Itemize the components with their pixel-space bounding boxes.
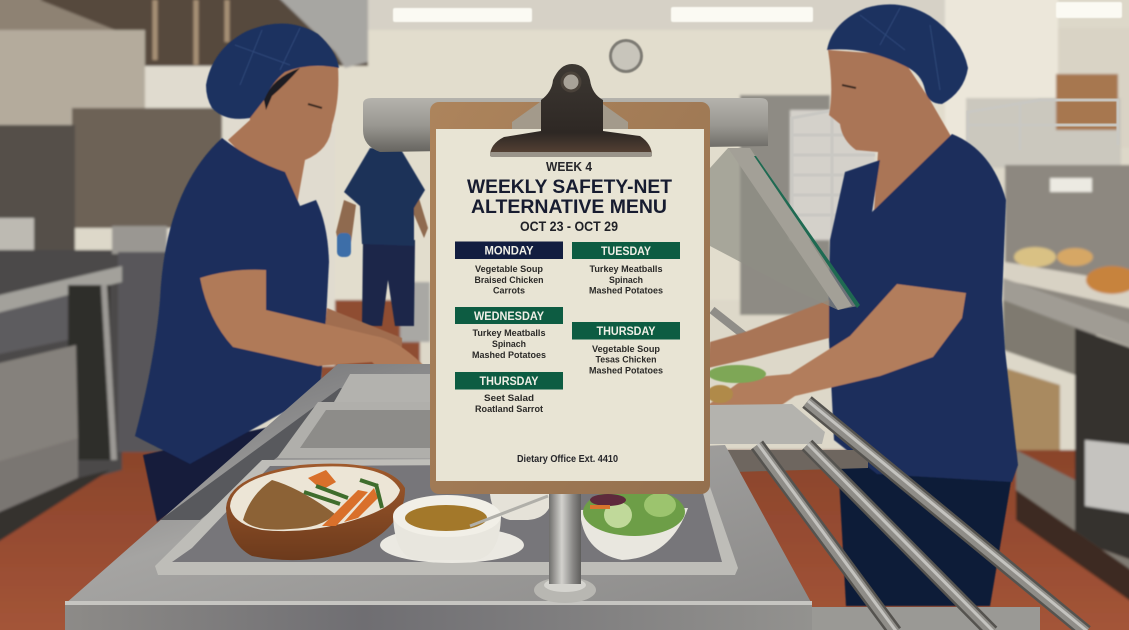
ceiling lights: [393, 2, 1122, 22]
Monday block: Carrots: [493, 286, 525, 296]
chicken: [243, 480, 335, 530]
right worker: hairnet: [827, 4, 968, 104]
clipboard post: [534, 492, 596, 603]
left worker: far arm: [325, 308, 402, 350]
week label: WEEK 4: [546, 160, 592, 174]
right worker: scrub top: [828, 134, 1018, 482]
Thursday block, left column: [455, 372, 563, 415]
front tray rim: [155, 458, 738, 575]
Tuesday block: Spinach: [609, 275, 643, 286]
worker in background: [336, 148, 428, 326]
Thursday block, right column: [572, 322, 680, 376]
rail lower bar: [812, 607, 1040, 630]
floor rails: [757, 401, 1087, 630]
wall clock: [609, 39, 643, 73]
right worker: [708, 4, 1018, 606]
Wednesday block: [455, 307, 563, 361]
clip hinge wings: [512, 102, 628, 129]
left worker: hairnet: [206, 23, 339, 119]
guard metal arm: [728, 148, 852, 310]
Monday block: Braised Chicken: [474, 275, 544, 286]
right worker: near arm: [708, 284, 966, 428]
sneeze guard: [363, 98, 860, 310]
Tuesday block: [572, 242, 680, 296]
counter front band: [65, 604, 812, 630]
dietary office contact: Dietary Office Ext. 4410: [517, 454, 618, 465]
Thursday block, right column: Vegetable Soup: [592, 344, 660, 355]
guard crossbar: [363, 98, 768, 152]
Thursday block, left column: Roatland Sarrot: [475, 404, 544, 415]
Thursday block, left column: THURSDAY: [480, 376, 539, 388]
guard green edge: [754, 156, 860, 308]
Wednesday block: Mashed Potatoes: [472, 350, 546, 361]
counter top: [65, 364, 812, 604]
left worker: eye: [308, 104, 322, 108]
left worker: scrub top: [135, 138, 329, 464]
right worker: neck and face: [828, 50, 952, 212]
Tuesday block: Turkey Meatballs: [590, 264, 662, 275]
Thursday block, right column: Mashed Potatoes: [589, 366, 663, 376]
carrots: [308, 470, 378, 526]
food: salad bowl: [580, 488, 688, 560]
food: soup bowl on saucer: [380, 495, 548, 563]
clip ring: [562, 73, 580, 91]
left worker: [135, 23, 430, 522]
guard glass panel: [710, 148, 858, 310]
menu paper: [436, 129, 704, 481]
Wednesday block: Turkey Meatballs: [472, 328, 546, 339]
middle pan: [277, 402, 430, 458]
left worker: trousers: [143, 420, 300, 522]
clip body: [490, 64, 652, 156]
right worker: far arm: [708, 300, 829, 368]
Monday block: [455, 242, 563, 296]
food: chicken and vegetables dish: [226, 464, 405, 560]
clip edge: [490, 152, 652, 157]
Wednesday block: Spinach: [492, 339, 526, 350]
rail cross support: [722, 450, 868, 472]
green beans: [304, 480, 382, 508]
right worker: eye: [842, 85, 856, 88]
Monday block: MONDAY: [484, 246, 534, 258]
salad on tray at right: [707, 365, 766, 403]
Monday block: Vegetable Soup: [475, 264, 543, 275]
right worker: trousers: [838, 460, 1013, 606]
rear rail section: [712, 310, 745, 336]
food: bowl behind: [490, 494, 552, 520]
storage racks behind right worker: [792, 100, 1118, 240]
Thursday block, left column: Seet Salad: [484, 393, 534, 404]
title line two: ALTERNATIVE MENU: [471, 196, 667, 218]
Thursday block, right column: THURSDAY: [596, 326, 656, 338]
serving counter: [65, 364, 812, 630]
counter dark left edge: [160, 388, 360, 520]
Tuesday block: TUESDAY: [601, 246, 651, 258]
right steel pan: [706, 404, 825, 444]
menu heading: [467, 160, 672, 234]
title line one: WEEKLY SAFETY-NET: [467, 176, 672, 198]
date range: OCT 23 - OCT 29: [520, 219, 618, 234]
back pan: [334, 374, 430, 402]
Tuesday block: Mashed Potatoes: [589, 286, 663, 296]
front tray well: [172, 464, 722, 562]
left worker: arm: [200, 270, 430, 394]
Wednesday block: WEDNESDAY: [474, 311, 544, 323]
Thursday block, right column: Tesas Chicken: [596, 354, 657, 366]
clipboard backing: [430, 102, 710, 494]
clipboard: [430, 64, 710, 494]
left worker: hair and ear: [264, 68, 300, 110]
left worker: neck and face: [228, 66, 338, 210]
